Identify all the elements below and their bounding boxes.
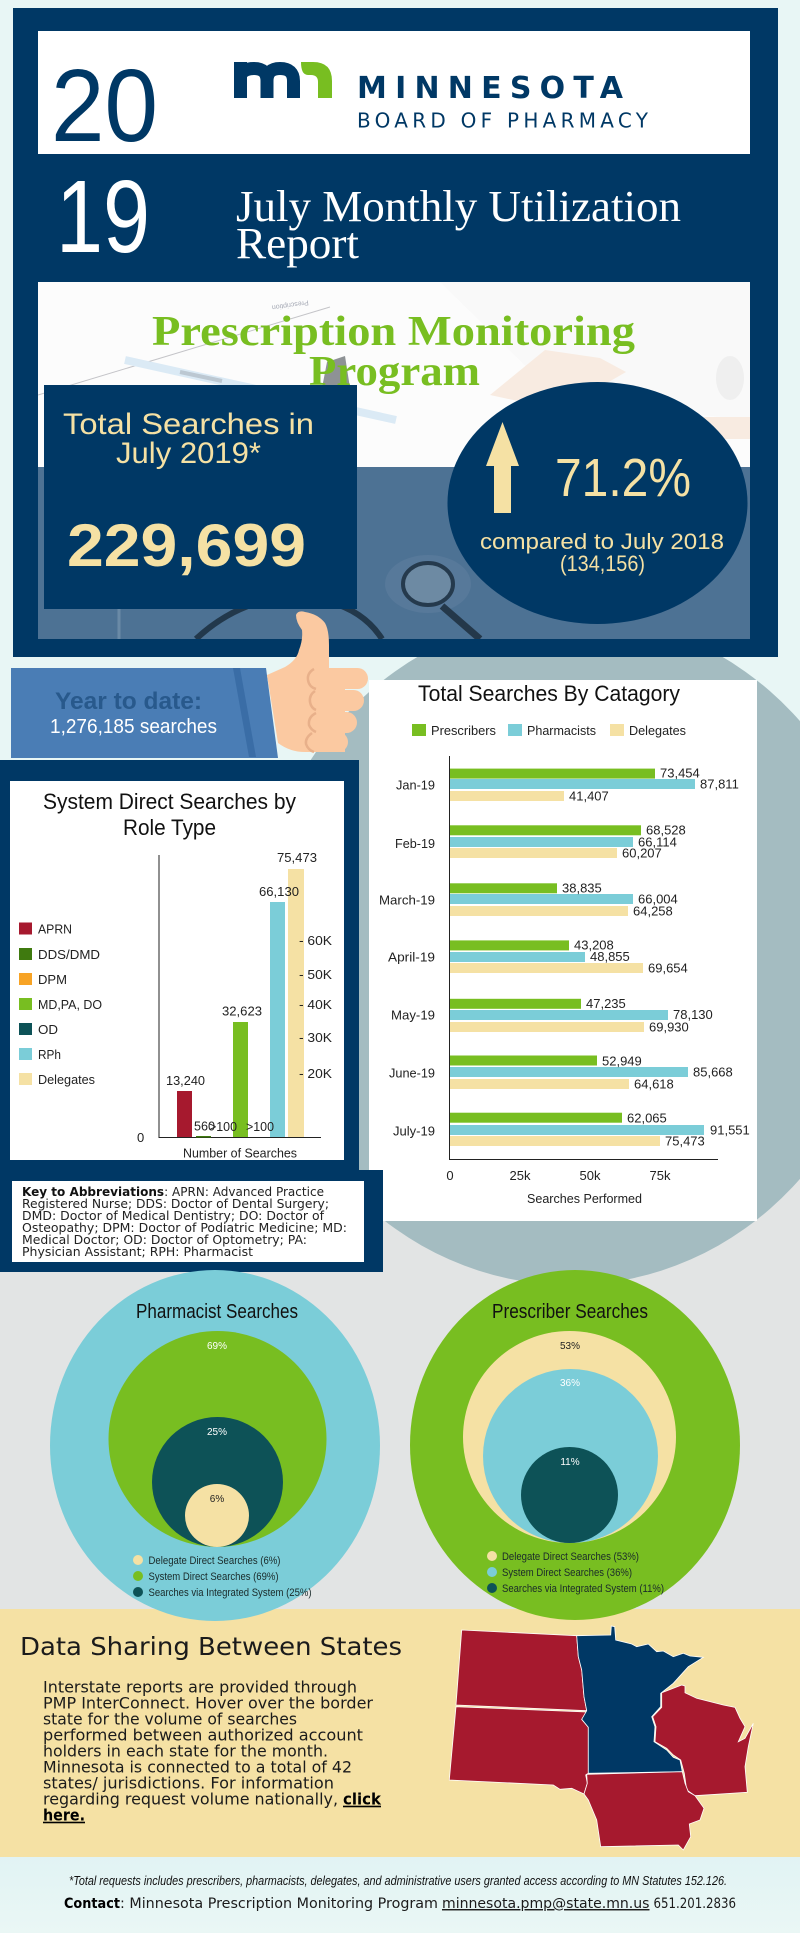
horizontal bar chart: 52,949 bbox=[602, 1053, 642, 1068]
hero title: prescription monitoring program: Prescription Monitoring bbox=[152, 309, 635, 355]
contact line: minnesota.pmp@state.mn.us bbox=[442, 1896, 650, 1912]
panel: report header bbox=[13, 8, 778, 657]
prescriber legend bbox=[487, 1551, 664, 1595]
callout: percent change: compared to July 2018 bbox=[480, 529, 724, 554]
horizontal bar chart: 73,454 bbox=[660, 766, 700, 781]
panel: pharmacist searches nested circles: 25% bbox=[207, 1427, 227, 1438]
horizontal bar chart: 64,258 bbox=[633, 904, 673, 918]
banner: year to date bbox=[11, 668, 278, 758]
horizontal bar chart: 91,551 bbox=[710, 1123, 750, 1138]
role legend: OD bbox=[38, 1022, 58, 1037]
heading: data sharing: Data Sharing Between States bbox=[20, 1632, 402, 1661]
horizontal bar chart: 64,618 bbox=[634, 1076, 674, 1092]
vertical bar chart: 560 bbox=[194, 1118, 215, 1134]
body text: states/ jurisdictions. For information bbox=[43, 1774, 334, 1793]
report title bbox=[236, 182, 681, 268]
pharmacist legend: Delegate Direct Searches (6%) bbox=[148, 1555, 280, 1567]
abbreviations text: Physician Assistant; RPH: Pharmacist bbox=[22, 1245, 253, 1259]
horizontal bar chart: 69,930 bbox=[649, 1019, 689, 1034]
chart legend: Delegates bbox=[629, 723, 686, 738]
body text: click bbox=[343, 1790, 381, 1809]
year digits bottom: 19 bbox=[56, 159, 150, 274]
icon: thumbs up hand bbox=[267, 611, 368, 752]
body text: holders in each state for the month. bbox=[43, 1742, 328, 1761]
arrow: up bbox=[486, 422, 519, 513]
state: north dakota bbox=[456, 1630, 587, 1711]
panel: system direct searches by role type bbox=[0, 760, 359, 1172]
horizontal bar chart: 62,065 bbox=[627, 1110, 667, 1126]
hero photo panel bbox=[38, 282, 758, 639]
report title: July Monthly Utilization bbox=[236, 182, 681, 231]
role legend: APRN bbox=[38, 922, 72, 936]
abbreviations text: Key to Abbreviations: APRN: Advanced Practice bbox=[22, 1185, 324, 1199]
role legend: DPM bbox=[38, 972, 67, 987]
horizontal bar chart: July-19 bbox=[393, 1124, 435, 1138]
state: wisconsin bbox=[653, 1685, 753, 1796]
data sharing band bbox=[0, 1609, 800, 1857]
contact line: Contact bbox=[64, 1896, 120, 1912]
callout: percent change bbox=[448, 382, 748, 624]
hero title: prescription monitoring program: Program bbox=[309, 349, 480, 395]
chart legend: Prescribers bbox=[431, 723, 496, 738]
banner: year to date: 1,276,185 searches bbox=[50, 716, 217, 738]
heading: prescriber searches: Prescriber Searches bbox=[492, 1301, 648, 1323]
horizontal bar chart: 78,130 bbox=[673, 1007, 713, 1022]
body text: regarding request volume nationally, bbox=[43, 1790, 338, 1809]
panel: data sharing between states bbox=[20, 1632, 402, 1825]
map: neighboring states bbox=[449, 1626, 753, 1850]
abbreviations text: DMD: Doctor of Medical Dentistry; DO: Doctor of bbox=[22, 1209, 325, 1223]
vertical bar chart: >100 bbox=[209, 1119, 237, 1134]
callout: percent change: 71.2% bbox=[555, 448, 691, 508]
vertical bar chart: 32,623 bbox=[222, 1004, 262, 1018]
hero photo panel: Prescription bbox=[271, 298, 309, 311]
chart title: total searches by category: Total Searches By Catagory bbox=[418, 681, 680, 706]
horizontal bar chart: 66,114 bbox=[638, 834, 677, 850]
pharmacist legend bbox=[133, 1555, 312, 1599]
wordmark: board of pharmacy: BOARD OF PHARMACY bbox=[357, 108, 649, 132]
horizontal bar chart: March-19 bbox=[379, 892, 435, 908]
horizontal bar chart: 68,528 bbox=[646, 823, 686, 838]
year digits top: 20 bbox=[51, 48, 158, 163]
vertical bar chart: 75,473 bbox=[277, 850, 317, 865]
vertical bar chart: >100 bbox=[246, 1119, 274, 1134]
vertical bar chart: - 50K bbox=[299, 967, 332, 982]
callout: total searches: July 2019* bbox=[116, 437, 261, 470]
vertical bar chart bbox=[137, 850, 332, 1160]
panel: key to abbreviations bbox=[0, 1170, 383, 1272]
role legend: Delegates bbox=[38, 1072, 95, 1087]
panel: prescriber searches nested circles: 11% bbox=[560, 1457, 580, 1468]
abbreviations text bbox=[22, 1185, 347, 1259]
role legend: RPh bbox=[38, 1047, 61, 1062]
vertical bar chart: - 20K bbox=[299, 1066, 332, 1081]
body text: Interstate reports are provided through bbox=[43, 1678, 357, 1697]
body text: here. bbox=[43, 1806, 85, 1825]
big number: 229,699: 229,699 bbox=[67, 512, 306, 579]
prescriber legend: System Direct Searches (36%) bbox=[502, 1567, 632, 1579]
horizontal bar chart: Jan-19 bbox=[396, 777, 435, 792]
horizontal bar chart: 66,004 bbox=[638, 892, 678, 907]
horizontal bar chart: May-19 bbox=[391, 1008, 435, 1023]
horizontal bar chart: 75,473 bbox=[665, 1134, 705, 1149]
icon: mn logo bbox=[234, 62, 332, 98]
body text: performed between authorized account bbox=[43, 1726, 363, 1745]
horizontal bar chart: 25k bbox=[510, 1168, 531, 1183]
vertical bar chart: 66,130 bbox=[259, 884, 299, 899]
callout: percent change: (134,156) bbox=[560, 551, 645, 576]
role legend: MD,PA, DO bbox=[38, 997, 102, 1012]
state: iowa bbox=[584, 1772, 704, 1850]
chart legend bbox=[412, 723, 686, 738]
horizontal bar chart: 43,208 bbox=[574, 937, 614, 952]
vertical bar chart: - 30K bbox=[299, 1030, 332, 1045]
pharmacist legend: Searches via Integrated System (25%) bbox=[148, 1587, 312, 1599]
panel: prescriber searches nested circles: 53% bbox=[560, 1341, 580, 1352]
heading: pharmacist searches: Pharmacist Searches bbox=[136, 1301, 298, 1323]
horizontal bar chart: 87,811 bbox=[700, 777, 739, 792]
horizontal bar chart: June-19 bbox=[389, 1066, 435, 1081]
horizontal bar chart bbox=[379, 756, 750, 1206]
banner: year to date: Year to date: bbox=[55, 688, 202, 715]
contact line: : Minnesota Prescription Monitoring Program bbox=[120, 1896, 438, 1912]
contact line: 651.201.2836 bbox=[654, 1896, 736, 1912]
panel: prescriber searches nested circles bbox=[410, 1270, 740, 1620]
horizontal bar chart: 41,407 bbox=[569, 788, 609, 803]
background ellipse behind category chart bbox=[255, 615, 800, 1285]
state: south dakota bbox=[449, 1707, 588, 1794]
horizontal bar chart: Searches Performed bbox=[527, 1191, 642, 1206]
role legend bbox=[19, 922, 102, 1087]
role legend: DDS/DMD bbox=[38, 947, 100, 962]
header logo strip bbox=[38, 31, 750, 163]
horizontal bar chart: 85,668 bbox=[693, 1065, 733, 1080]
horizontal bar chart: 48,855 bbox=[590, 949, 630, 964]
panel: pharmacist searches nested circles: 69% bbox=[207, 1341, 227, 1352]
body text: Minnesota is connected to a total of 42 bbox=[43, 1758, 352, 1777]
callout: total searches: Total Searches in bbox=[63, 408, 314, 441]
vertical bar chart: 13,240 bbox=[166, 1073, 205, 1088]
pharmacist legend: System Direct Searches (69%) bbox=[148, 1571, 278, 1583]
body text: state for the volume of searches bbox=[43, 1710, 297, 1729]
panel: prescriber searches nested circles: 36% bbox=[560, 1378, 580, 1389]
body text: PMP InterConnect. Hover over the border bbox=[43, 1694, 373, 1713]
vertical bar chart: - 40K bbox=[299, 997, 332, 1012]
prescriber legend: Searches via Integrated System (11%) bbox=[502, 1583, 664, 1595]
chart title: system direct searches bbox=[43, 789, 296, 840]
body text bbox=[43, 1678, 381, 1825]
chart title: system direct searches: System Direct Searches by bbox=[43, 789, 296, 814]
vertical bar chart: - 60K bbox=[299, 933, 332, 948]
horizontal bar chart: 50k bbox=[580, 1168, 601, 1183]
horizontal bar chart: 75k bbox=[650, 1168, 671, 1183]
horizontal bar chart: 60,207 bbox=[622, 846, 662, 860]
horizontal bar chart: 0 bbox=[446, 1168, 454, 1183]
chart title: system direct searches: Role Type bbox=[123, 815, 216, 840]
callout: total searches bbox=[44, 385, 357, 609]
contact line bbox=[64, 1896, 736, 1912]
report title: Report bbox=[236, 219, 359, 268]
abbreviations text: Osteopathy; DPM: Doctor of Podiatric Medicine; MD: bbox=[22, 1221, 347, 1235]
abbreviations text: Medical Doctor; OD: Doctor of Optometry; PA: bbox=[22, 1233, 307, 1247]
panel: pharmacist searches nested circles: 6% bbox=[210, 1494, 224, 1505]
vertical bar chart: 0 bbox=[137, 1130, 144, 1145]
panel: pharmacist searches nested circles bbox=[50, 1270, 380, 1621]
wordmark: minnesota: MINNESOTA bbox=[357, 71, 624, 106]
prescriber legend: Delegate Direct Searches (53%) bbox=[502, 1551, 639, 1563]
horizontal bar chart: 69,654 bbox=[648, 961, 688, 976]
state: minnesota bbox=[577, 1626, 703, 1773]
chart legend: Pharmacists bbox=[527, 723, 596, 738]
horizontal bar chart: 47,235 bbox=[586, 996, 626, 1011]
hero title: prescription monitoring program bbox=[152, 309, 635, 395]
abbreviations text: Registered Nurse; DDS: Doctor of Dental Surgery; bbox=[22, 1197, 329, 1211]
horizontal bar chart: Feb-19 bbox=[395, 836, 435, 851]
panel: total searches by category chart bbox=[369, 680, 757, 1221]
horizontal bar chart: April-19 bbox=[388, 950, 435, 965]
vertical bar chart: Number of Searches bbox=[183, 1146, 297, 1160]
horizontal bar chart: 38,835 bbox=[562, 880, 602, 895]
